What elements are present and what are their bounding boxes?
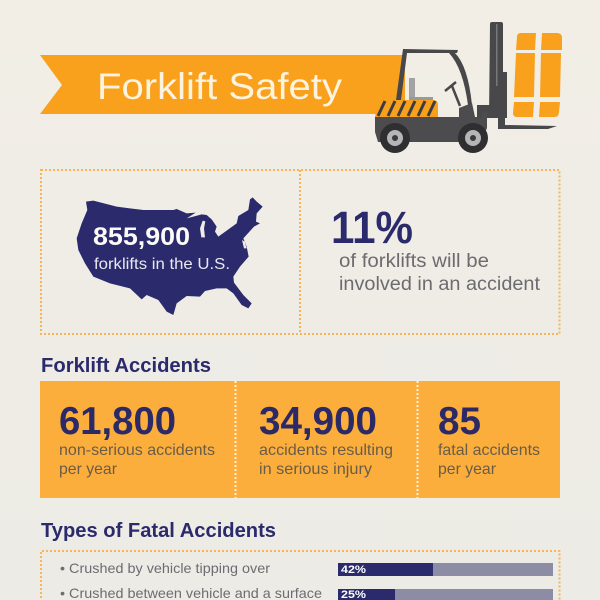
caption: 11% of forklifts: involved in an accident	[339, 274, 541, 295]
steering wheel	[445, 82, 460, 106]
caption: 11% of forklifts: of forklifts will be	[339, 251, 489, 272]
body	[375, 103, 487, 142]
caption: 11% of forklifts	[339, 251, 541, 295]
title banner	[40, 55, 405, 114]
stat: 61,800: per year	[59, 461, 118, 478]
stat: 61,800	[59, 400, 215, 478]
stat: 61,800: 61,800	[59, 400, 176, 443]
stat: 11%: 11%	[331, 202, 413, 253]
stat: 34,900: accidents resulting	[259, 442, 393, 459]
row: vehicle tipping over: • Crushed by vehicle tipping over	[60, 560, 270, 576]
cab frame	[396, 49, 472, 105]
stat: 34,900: 34,900	[259, 400, 377, 443]
row: vehicle tipping over: 42%	[341, 564, 366, 576]
title: Forklift Safety	[97, 66, 343, 107]
seat	[409, 78, 415, 100]
hazard stripes	[375, 100, 438, 117]
panel: forklift counts	[41, 170, 560, 334]
heading: Types of Fatal Accidents: Types of Fatal Accidents	[41, 520, 276, 542]
stat: 85: fatal accidents	[438, 442, 540, 459]
icon: forklift with load	[375, 22, 562, 153]
stat: 85	[438, 400, 540, 478]
stat: 61,800: non-serious accidents	[59, 442, 215, 459]
stat: 85: per year	[438, 461, 497, 478]
map of the U.S.	[77, 197, 263, 315]
heading: Forklift Accidents: Forklift Accidents	[41, 355, 211, 377]
stat: 85: 85	[438, 400, 481, 443]
panel: types of fatal accidents	[41, 551, 560, 600]
stat: 855,900: 855,900	[93, 223, 190, 251]
caption: forklifts in the U.S.: forklifts in the U.S.	[94, 256, 230, 273]
row: vehicle tipping over	[60, 560, 553, 576]
wheels	[380, 123, 488, 153]
row: crushed between vehicle and surface	[60, 585, 553, 600]
panel: accident counts	[40, 381, 560, 498]
stat: 34,900: in serious injury	[259, 461, 372, 478]
load	[513, 33, 562, 117]
stat: 34,900	[259, 400, 393, 478]
mast and forks	[477, 22, 557, 129]
